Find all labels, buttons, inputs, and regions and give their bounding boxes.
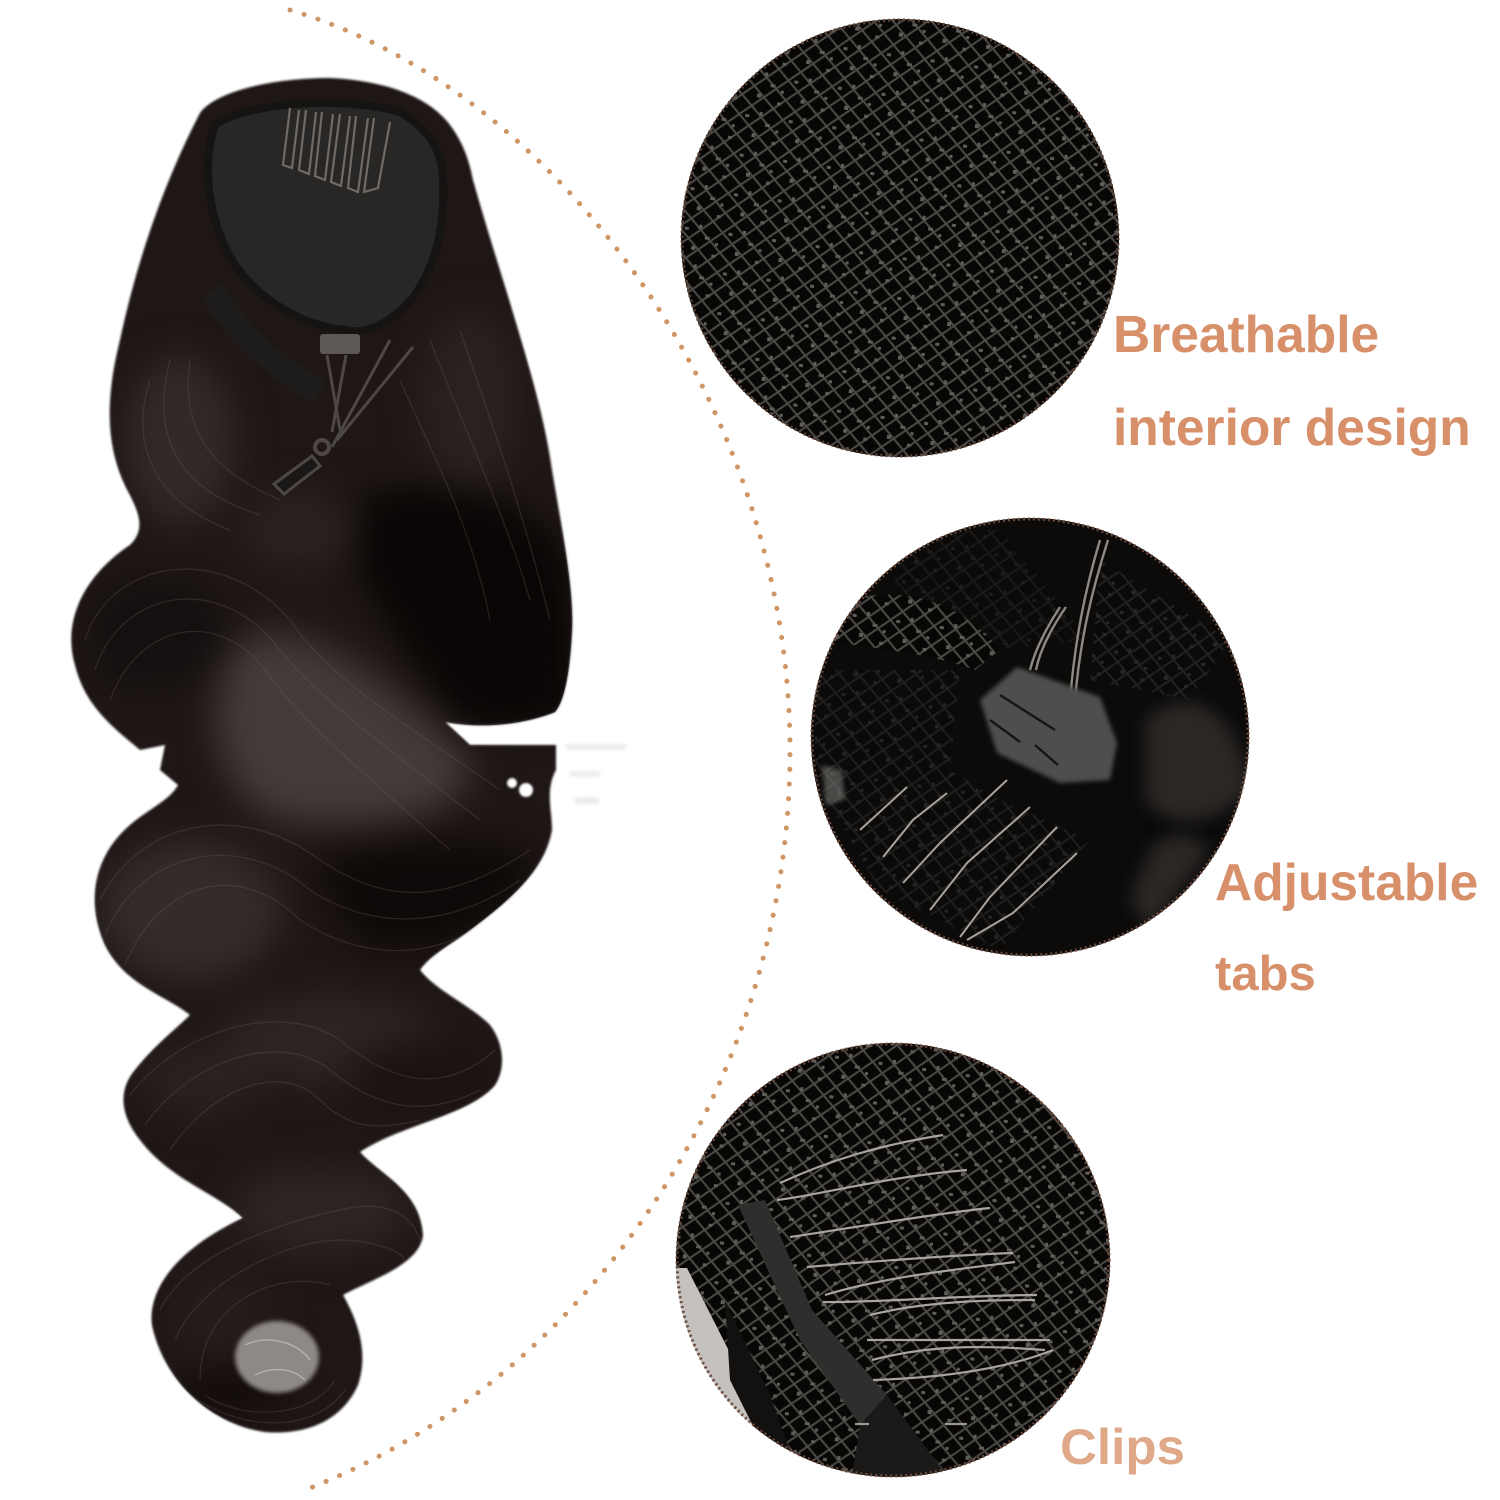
cap interior with comb — [208, 103, 443, 392]
label: clips: Clips — [1060, 1419, 1185, 1475]
hair end curl — [235, 1321, 319, 1393]
ponytail hair — [71, 78, 626, 1432]
strap band — [212, 290, 320, 392]
adjustable strap and toggles — [274, 334, 413, 494]
circle: clips — [670, 1043, 1110, 1490]
hair light and shadow masses — [90, 310, 575, 1415]
seam band — [738, 1200, 887, 1425]
label: adjustable tabs — [1215, 853, 1478, 1001]
circle: adjustable tabs — [811, 518, 1250, 956]
label: breathable interior design: Breathable — [1113, 305, 1379, 363]
comb wires — [777, 1135, 1053, 1380]
label: breathable interior design — [1113, 305, 1471, 456]
dotted arc divider — [290, 10, 790, 1490]
white retouch artefacts — [507, 778, 533, 797]
label: adjustable tabs: tabs — [1215, 947, 1316, 1001]
label: adjustable tabs: Adjustable — [1215, 853, 1478, 911]
faint grey specks — [566, 745, 626, 803]
circle: breathable interior — [681, 19, 1119, 457]
label: breathable interior design: interior design — [1113, 398, 1471, 456]
hair strands — [85, 330, 550, 1423]
grey backing wedge — [676, 1268, 776, 1443]
comb — [283, 108, 390, 192]
